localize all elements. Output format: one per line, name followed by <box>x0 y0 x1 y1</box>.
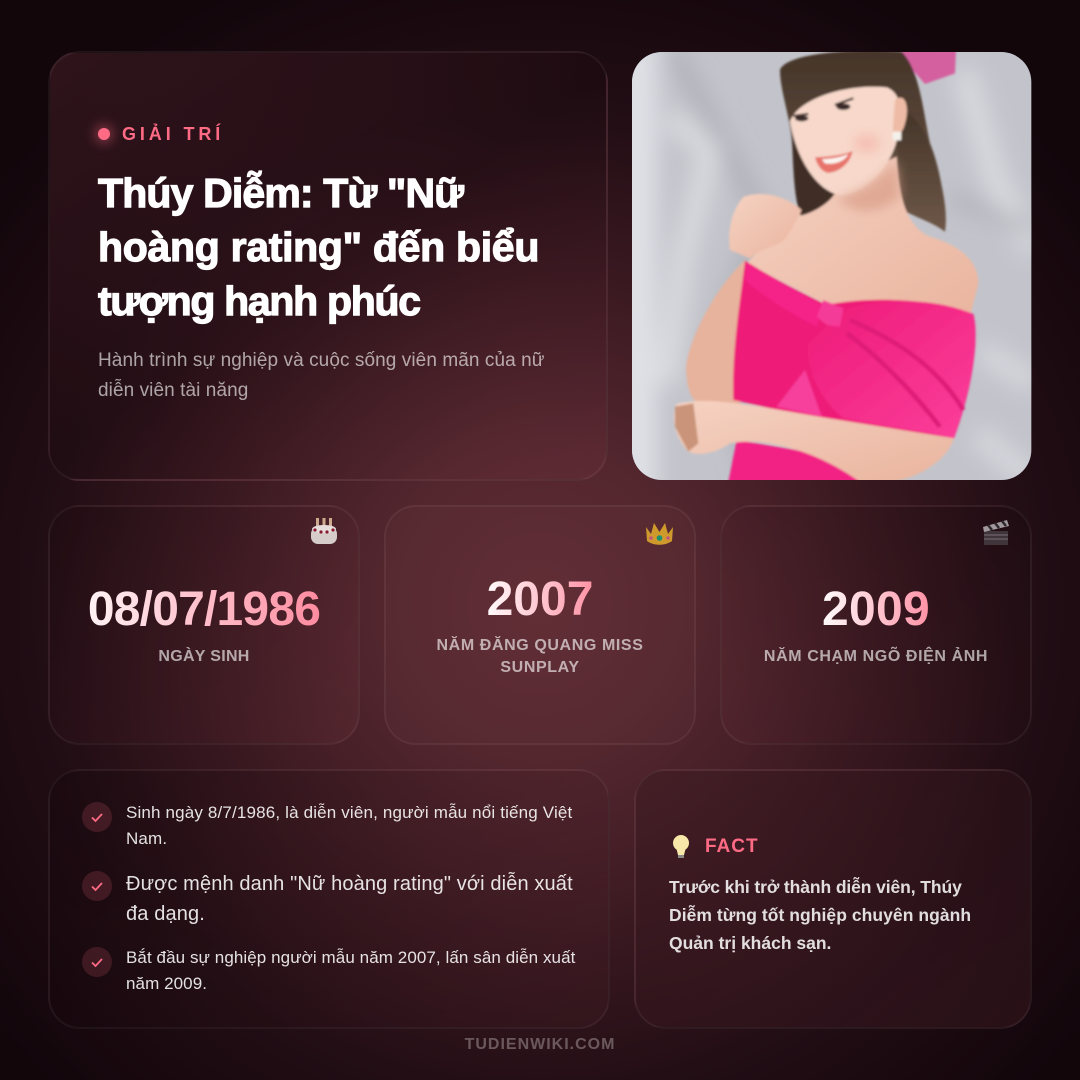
subtitle: Hành trình sự nghiệp và cuộc sống viên mãn của nữ <box>98 350 545 371</box>
fact text: Quản trị khách sạn. <box>669 933 831 953</box>
fact text: Diễm từng tốt nghiệp chuyên ngành <box>669 905 971 925</box>
point 3 <box>126 948 576 993</box>
icon: clapperboard <box>983 520 1009 545</box>
point 2 <box>126 872 573 925</box>
icon: crown <box>646 523 673 545</box>
panel: stat film debut <box>720 505 1032 745</box>
stat value: 2009 <box>732 584 1020 636</box>
point 1 <box>126 803 572 848</box>
check icon 2 <box>82 871 112 901</box>
icon: light bulb <box>673 835 689 858</box>
stat label: 2009: NĂM CHẠM NGÕ ĐIỆN ẢNH <box>764 648 988 665</box>
check icon 1 <box>82 802 112 832</box>
point 2: Được mệnh danh "Nữ hoàng rating" với diễn xuất <box>126 873 573 895</box>
stat value: birth date: 08/07/1986 <box>88 583 320 636</box>
category tag <box>88 118 224 150</box>
fact heading: FACT <box>705 836 759 857</box>
subtitle <box>98 350 545 401</box>
stat label: 2007: NĂM ĐĂNG QUANG MISS <box>437 637 643 654</box>
fact text: Trước khi trở thành diễn viên, Thúy <box>669 877 962 897</box>
stat label: birth date: NGÀY SINH <box>158 648 250 665</box>
panel: hero header <box>48 51 608 481</box>
title: tượng hạnh phúc <box>98 278 420 324</box>
panel: fact <box>634 769 1032 1029</box>
point 1: Nam. <box>126 829 167 848</box>
fact text <box>669 877 971 953</box>
icon: birthday cake <box>311 518 337 544</box>
title: hoàng rating" đến biểu <box>98 224 539 270</box>
stat value: 2007: 2007 <box>487 573 593 626</box>
title: Thúy Diễm: Từ "Nữ <box>98 170 463 216</box>
point 2: đa dạng. <box>126 903 205 925</box>
stat value: 2007 <box>396 574 684 626</box>
stat label: 2007: SUNPLAY <box>500 659 580 676</box>
point 3: Bắt đầu sự nghiệp người mẫu năm 2007, lấn sân diễn xuất <box>126 948 575 967</box>
stat value: 2009: 2009 <box>822 583 930 636</box>
point 1: Sinh ngày 8/7/1986, là diễn viên, người mẫu nổi tiếng Việt <box>126 803 572 822</box>
photo: portrait of woman in pink dress <box>632 52 1032 480</box>
stat label: 2007 <box>437 636 643 676</box>
title <box>98 170 539 324</box>
point 3: năm 2009. <box>126 974 207 993</box>
tag text: GIẢI TRÍ <box>122 124 224 144</box>
panel: stat birth date <box>48 505 360 745</box>
tag dot <box>98 128 110 140</box>
panel: stat crowned year <box>384 505 696 745</box>
check icon 3 <box>82 947 112 977</box>
footer credit: TUDIENWIKI.COM <box>465 1036 615 1053</box>
panel: key points <box>48 769 610 1029</box>
subtitle: diễn viên tài năng <box>98 380 248 401</box>
